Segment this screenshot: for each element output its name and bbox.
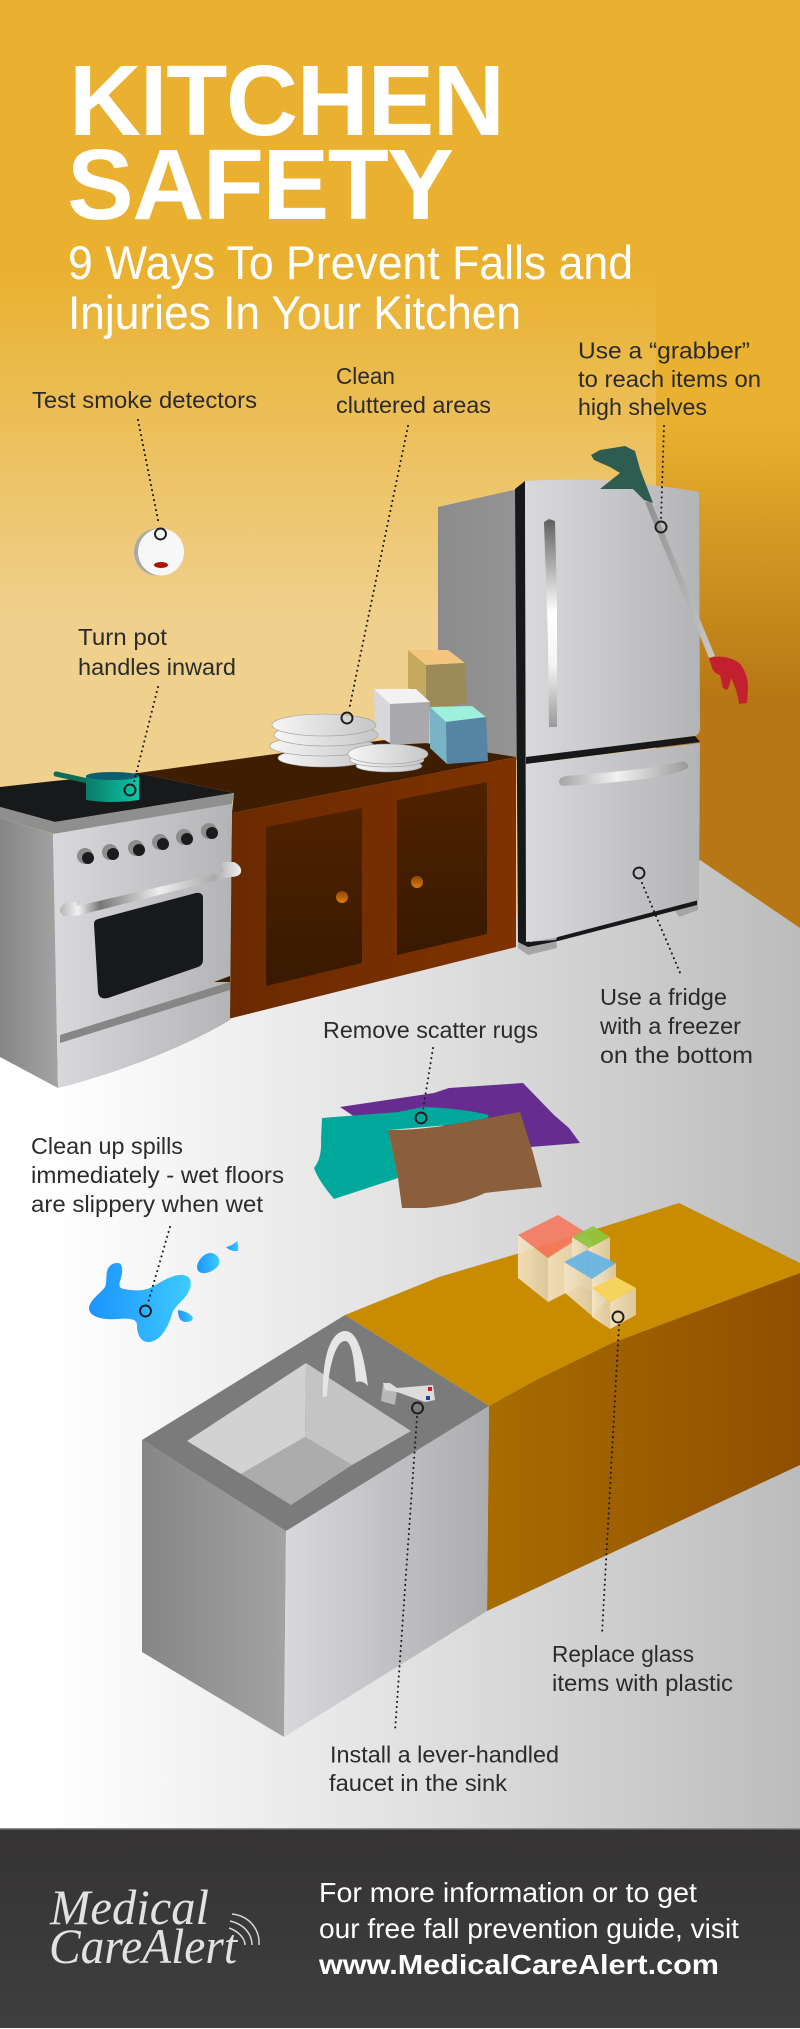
upper handle	[544, 519, 557, 727]
panel: footer	[0, 1828, 800, 2028]
callout: clean up spills: are slippery when wet	[31, 1191, 264, 1217]
callout: turn pot handles	[78, 624, 236, 796]
sink left face	[142, 1440, 286, 1737]
cabinet door left	[266, 808, 362, 986]
upper fridge door	[525, 480, 700, 757]
title: KITCHEN	[69, 45, 505, 157]
callout: test smoke detectors: Test smoke detectors	[32, 387, 257, 413]
callout: lever-handled faucet: Install a lever-handled	[330, 1742, 559, 1768]
stove knobs	[77, 823, 218, 864]
oven handle	[60, 862, 241, 916]
panel: sink unit	[142, 1315, 489, 1737]
callout: fridge with freezer: on the bottom	[600, 1042, 753, 1068]
stove lip	[0, 793, 234, 834]
icon: clutter boxes	[374, 650, 488, 764]
panel: stove	[0, 772, 241, 1088]
footer text: our free fall prevention guide, visit	[319, 1913, 739, 1944]
callout: grabber: high shelves	[578, 394, 707, 420]
callout: turn pot handles: handles inward	[78, 654, 236, 680]
callout: fridge with freezer	[599, 868, 753, 1068]
oven window	[94, 893, 203, 998]
callout: lever-handled faucet	[329, 1402, 559, 1796]
panel: amber counter	[345, 1203, 800, 1611]
panel: base cabinet	[138, 740, 516, 1019]
lower handle	[559, 761, 688, 786]
icon: stacked plates	[270, 714, 428, 772]
footer text	[318, 1877, 739, 1980]
stove front	[53, 804, 232, 1088]
title: SAFETY	[67, 129, 454, 241]
counter top	[345, 1203, 800, 1406]
callout: grabber: to reach items on	[578, 366, 761, 392]
callout: grabber: Use a “grabber”	[578, 338, 750, 364]
lower fridge door	[526, 743, 700, 942]
callout: turn pot handles: Turn pot	[78, 624, 168, 650]
fridge feet	[518, 900, 698, 955]
stove bottom strip	[60, 982, 230, 1043]
stove side	[0, 818, 58, 1088]
callout: grabber	[578, 338, 761, 532]
callout: clean cluttered areas: cluttered areas	[336, 392, 491, 418]
callout: clean cluttered areas	[336, 363, 491, 724]
logo: Medical CareAlert: CareAlert	[49, 1918, 238, 1974]
callout: remove scatter rugs: Remove scatter rugs	[323, 1017, 538, 1043]
callout: clean cluttered areas: Clean	[336, 363, 395, 389]
icon: water spill	[89, 1241, 238, 1342]
sink front face	[284, 1406, 489, 1737]
subtitle	[68, 236, 633, 339]
panel: title block	[67, 45, 633, 339]
cabinet knobs	[336, 876, 423, 903]
title	[67, 45, 505, 241]
lever handle	[381, 1383, 435, 1405]
callout: clean up spills	[31, 1133, 284, 1316]
floor	[0, 860, 800, 1829]
fridge black frame	[515, 481, 697, 947]
icon: pot	[56, 772, 139, 802]
cabinet front	[228, 757, 516, 1019]
background: kitchen wall	[0, 0, 800, 1100]
callout: replace glass items: items with plastic	[552, 1670, 733, 1696]
icon: smoke detector	[134, 528, 184, 576]
stove top	[0, 773, 234, 822]
callout: fridge with freezer: Use a fridge	[600, 984, 727, 1010]
icon: scatter rugs	[314, 1083, 580, 1208]
footer text: www.MedicalCareAlert.com	[318, 1949, 719, 1980]
callout: fridge with freezer: with a freezer	[599, 1013, 741, 1039]
logo: Medical CareAlert	[49, 1879, 259, 1974]
icon: grabber tool	[591, 446, 748, 704]
panel: fridge	[438, 480, 700, 955]
logo: Medical CareAlert: Medical	[49, 1879, 209, 1935]
sink top	[142, 1315, 489, 1531]
sink basin	[187, 1363, 411, 1505]
callout: replace glass items: Replace glass	[552, 1641, 694, 1667]
subtitle: 9 Ways To Prevent Falls and	[68, 236, 633, 289]
faucet	[323, 1331, 368, 1397]
callout: clean up spills: Clean up spills	[31, 1133, 183, 1159]
callout: test smoke detectors	[32, 387, 257, 540]
counter front	[487, 1273, 800, 1611]
subtitle: Injuries In Your Kitchen	[68, 286, 521, 339]
callout: clean up spills: immediately - wet floors	[31, 1162, 284, 1188]
icon: plastic containers	[518, 1215, 636, 1329]
footer text: For more information or to get	[319, 1877, 697, 1908]
cabinet door right	[397, 782, 487, 955]
callout: remove scatter rugs	[323, 1017, 538, 1124]
callout: replace glass items	[552, 1312, 733, 1696]
fridge divider	[526, 736, 700, 764]
callout: lever-handled faucet: faucet in the sink	[329, 1770, 508, 1796]
counter top	[138, 740, 516, 813]
fridge side	[438, 489, 518, 760]
